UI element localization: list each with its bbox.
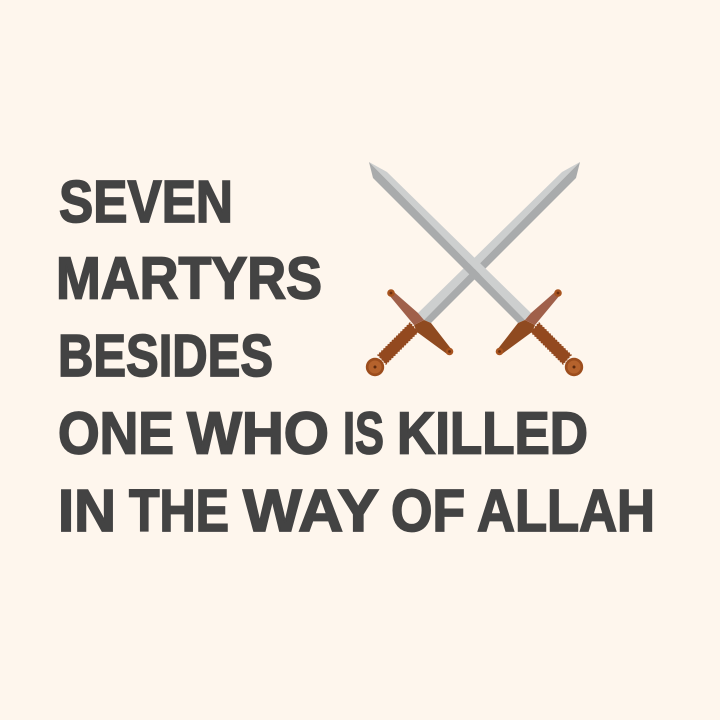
icon: sword with handle at lower right (369, 162, 583, 376)
title: heading text: OF (391, 478, 465, 544)
title: heading text: SEVEN (59, 169, 233, 235)
title: heading text: ALLAH (477, 478, 655, 544)
icon: sword with handle at lower left (366, 162, 580, 376)
title: heading text: MARTYRS (56, 246, 322, 312)
title: heading text: IS (343, 400, 384, 466)
title: heading text (56, 169, 655, 544)
title: heading text: THE (129, 478, 229, 544)
title: heading text: ONE (58, 400, 174, 466)
title: heading text: IN (58, 478, 116, 544)
title: heading text: BESIDES (58, 323, 273, 389)
title: heading text: KILLED (397, 400, 588, 466)
icon: crossed swords (366, 162, 583, 376)
title: heading text: WHO (187, 400, 329, 466)
title: heading text: WAY (243, 478, 379, 544)
